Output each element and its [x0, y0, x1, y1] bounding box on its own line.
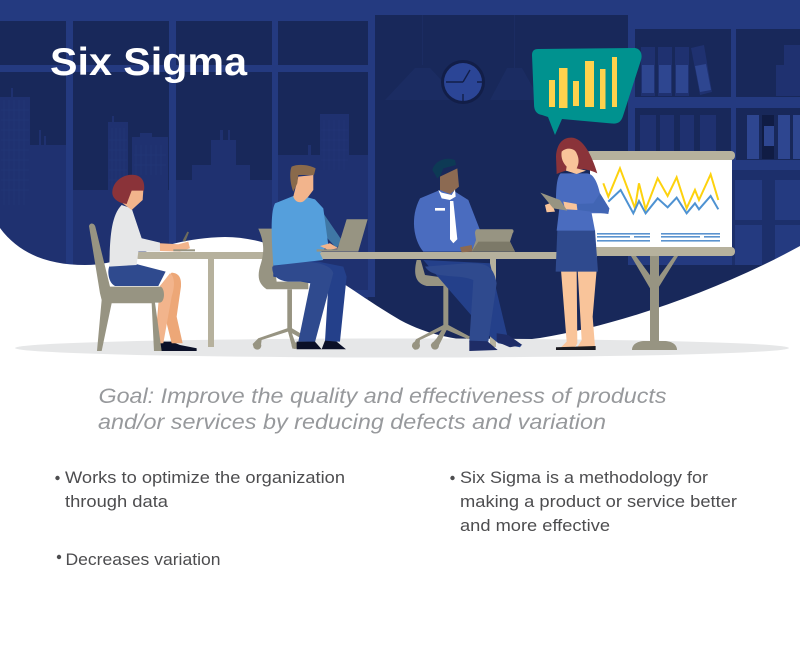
wall clock [441, 60, 485, 104]
bullet: methodology: Six Sigma is a methodology for [460, 468, 708, 487]
person: man with laptop [253, 165, 368, 350]
skyline windows [1, 100, 348, 205]
goal statement: Goal: Improve the quality and effectiveness of products [98, 385, 667, 408]
person: man with tablet [412, 159, 522, 351]
flip chart [586, 151, 735, 350]
meeting table [137, 252, 597, 347]
office background [0, 0, 800, 360]
person: woman writing [89, 175, 197, 351]
bullet: optimize [55, 468, 345, 511]
title: Six Sigma [50, 41, 247, 84]
window frame [0, 15, 375, 305]
ceiling lamps [385, 15, 540, 100]
bullet: methodology [450, 468, 737, 535]
chart caption lines [597, 233, 720, 242]
speech bubble with bar chart [532, 48, 642, 135]
white wave [0, 228, 800, 661]
line chart [593, 168, 718, 213]
floor shadow [15, 338, 789, 358]
person: presenter woman [540, 138, 609, 350]
bullet: methodology: and more effective [460, 516, 610, 535]
cabinet drawers [735, 180, 800, 265]
bullet: optimize: through data [65, 492, 169, 511]
bullet: optimize: Works to optimize the organization [65, 468, 345, 487]
bullet: variation: Decreases variation [66, 550, 220, 569]
city skyline [0, 88, 368, 307]
goal statement [98, 385, 667, 434]
goal statement: and/or services by reducing defects and variation [98, 411, 606, 434]
bullet: methodology: making a product or service better [460, 492, 737, 511]
bookshelf [628, 15, 800, 265]
chart stand [631, 256, 678, 350]
